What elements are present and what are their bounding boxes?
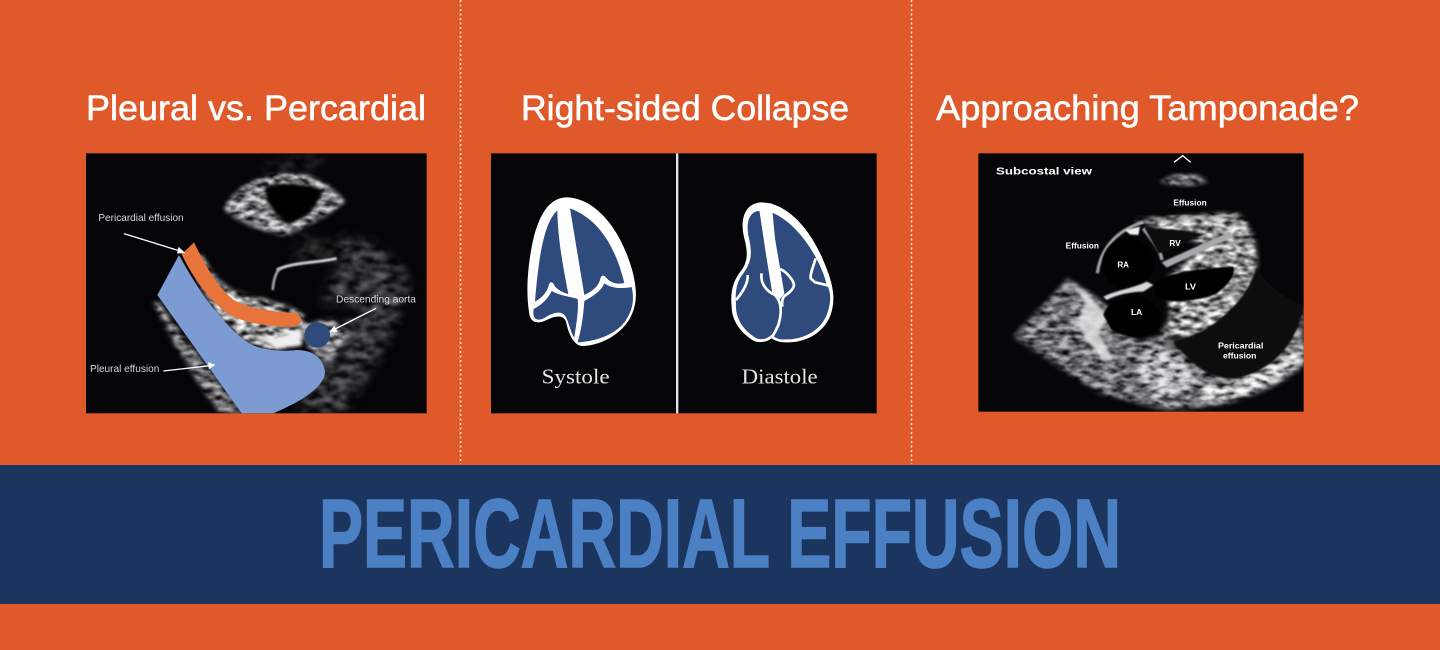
heading: Pleural vs. Percardial: Pleural vs. Percardial <box>86 89 426 128</box>
heading: Approaching Tamponade?: Approaching Tamponade? <box>936 89 1359 128</box>
labels: Subcostal view <box>996 167 1093 178</box>
labels: LA <box>1131 307 1143 317</box>
heart: diastole <box>731 202 833 342</box>
labels <box>996 167 1263 360</box>
pericardial effusion shape <box>182 242 301 327</box>
ultrasound texture <box>1013 156 1304 410</box>
title band <box>0 465 1440 604</box>
label: Diastole: Diastole <box>742 366 818 388</box>
labels: Effusion <box>1066 241 1099 251</box>
labels: Pericardial effusion <box>98 213 184 224</box>
labels: Pleural effusion <box>90 364 159 375</box>
labels: RV <box>1169 238 1181 248</box>
labels: Pericardial <box>1218 340 1263 350</box>
labels: Effusion <box>1173 197 1207 207</box>
descending aorta <box>305 322 330 348</box>
labels <box>90 213 417 375</box>
labels: LV <box>1185 282 1196 292</box>
arrows <box>124 234 376 371</box>
ultrasound texture <box>153 155 408 413</box>
labels: effusion <box>1223 350 1256 360</box>
heading: Right-sided Collapse: Right-sided Collapse <box>521 89 849 128</box>
labels: RA <box>1117 259 1130 269</box>
labels: Descending aorta <box>336 294 417 305</box>
label: Systole: Systole <box>542 366 610 388</box>
panel: right-sided collapse diagram <box>491 153 877 413</box>
panel: pleural vs pericardial ultrasound <box>86 153 427 413</box>
panel: subcostal view ultrasound <box>978 153 1304 412</box>
pleural effusion shape <box>157 255 325 413</box>
heart: systole <box>527 197 636 346</box>
